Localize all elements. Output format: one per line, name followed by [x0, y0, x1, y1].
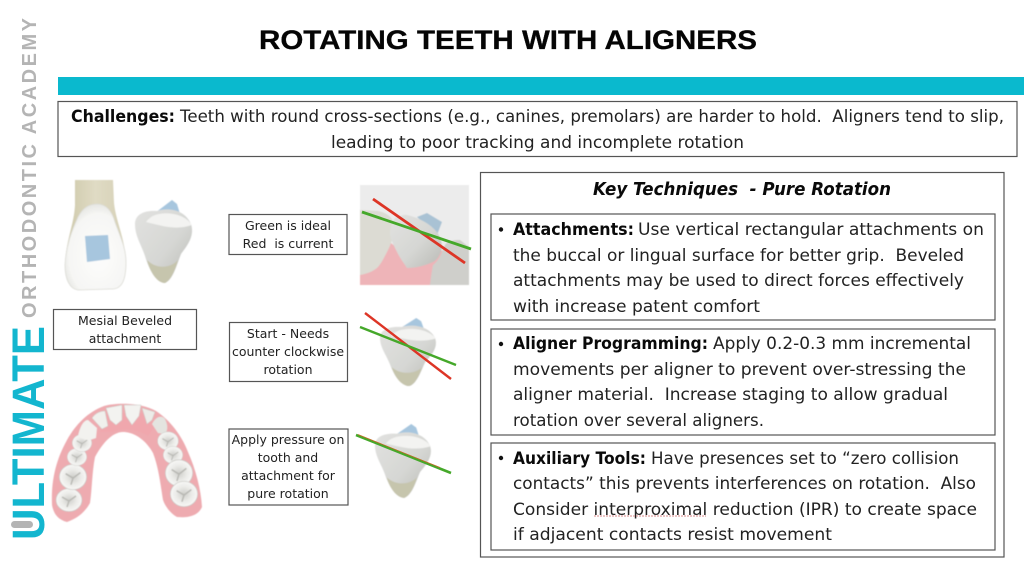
card: auxiliary tools — [491, 443, 995, 550]
label: apply pressure: attachment for — [241, 468, 336, 483]
card: aligner programming: Apply 0.2-0.3 mm incremental — [713, 334, 971, 354]
card: attachments: Use vertical rectangular attachments on — [638, 220, 984, 240]
title: ROTATING TEETH WITH ALIGNERS — [259, 25, 757, 55]
label: apply pressure: Apply pressure on — [232, 432, 344, 447]
logo word: ORTHODONTIC ACADEMY: ORTHODONTIC ACADEMY — [19, 17, 41, 318]
label: mesial beveled attachment: Mesial Beveled — [78, 313, 172, 328]
card: attachments: the buccal or lingual surface for better grip. Beveled — [513, 246, 964, 266]
label: apply pressure: pure rotation — [247, 486, 329, 501]
card: auxiliary tools: contacts” this prevents interferences on rotation. Also — [513, 474, 976, 494]
green line — [362, 212, 471, 249]
card: auxiliary tools: Have presences set to “zero collision — [651, 449, 959, 469]
label: green ideal, red current: Red is current — [243, 236, 333, 251]
card: aligner programming — [491, 329, 995, 435]
panel: challenges — [58, 102, 1017, 156]
logo word: ULTIMATE: ULTIMATE — [3, 326, 54, 540]
challenges label: Challenges: — [71, 107, 175, 127]
teal header bar — [58, 77, 1024, 95]
card: aligner programming: Aligner Programming: — [513, 334, 708, 354]
card: aligner programming: movements per aligner to prevent over-stressing the — [513, 360, 966, 380]
logo: vertical brand wordmark — [3, 17, 54, 540]
label: start, counter clockwise rotation: rotation — [263, 362, 313, 377]
green line — [360, 327, 456, 365]
label: green ideal, red current: Green is ideal — [245, 218, 331, 233]
card: auxiliary tools: if adjacent contacts resist movement — [513, 525, 832, 545]
label: start, counter clockwise rotation — [230, 322, 348, 382]
label: green ideal, red current — [229, 214, 347, 254]
label: start, counter clockwise rotation: Start - Needs — [247, 326, 329, 341]
icon: front view tooth with attachment — [65, 180, 126, 290]
label: mesial beveled attachment: attachment — [89, 331, 161, 346]
card: attachments: Attachments: — [513, 220, 634, 240]
image: adjacent teeth with green and red lines — [360, 185, 471, 285]
card: aligner programming: aligner material. Increase staging to allow gradual — [513, 385, 948, 405]
card: aligner programming: rotation over several aligners. — [513, 411, 764, 431]
icon: dental arch — [52, 404, 202, 522]
challenges text line 1: Teeth with round cross-sections (e.g., canines, premolars) are harder to hold. Aligners tend to slip, — [179, 107, 1004, 127]
icon: tooth at start with lines — [360, 313, 456, 386]
logo accent: grey bar in the U — [11, 521, 33, 528]
card: auxiliary tools: Auxiliary Tools: — [513, 449, 646, 469]
icon: tooth rotated with aligned lines — [356, 424, 451, 498]
challenges text line 2: leading to poor tracking and incomplete rotation — [331, 133, 744, 153]
label: mesial beveled attachment — [54, 310, 196, 350]
card: attachments — [491, 214, 995, 320]
heading: key techniques: Key Techniques - Pure Rotation — [593, 179, 891, 200]
red line — [365, 313, 451, 379]
red line — [373, 199, 465, 263]
card: attachments: attachments may be used to direct forces effectively — [513, 271, 964, 291]
card: auxiliary tools: Consider interproximal reduction (IPR) to create space — [513, 500, 977, 520]
green line — [356, 435, 451, 473]
label: start, counter clockwise rotation: counter clockwise — [232, 344, 344, 359]
icon: occlusal view tooth with attachment — [135, 200, 192, 283]
panel: key techniques — [480, 172, 1004, 557]
card: attachments: with increase patent comfort — [513, 297, 760, 317]
label: apply pressure: tooth and — [258, 450, 318, 465]
red line — [358, 434, 440, 468]
label: apply pressure — [229, 429, 348, 505]
